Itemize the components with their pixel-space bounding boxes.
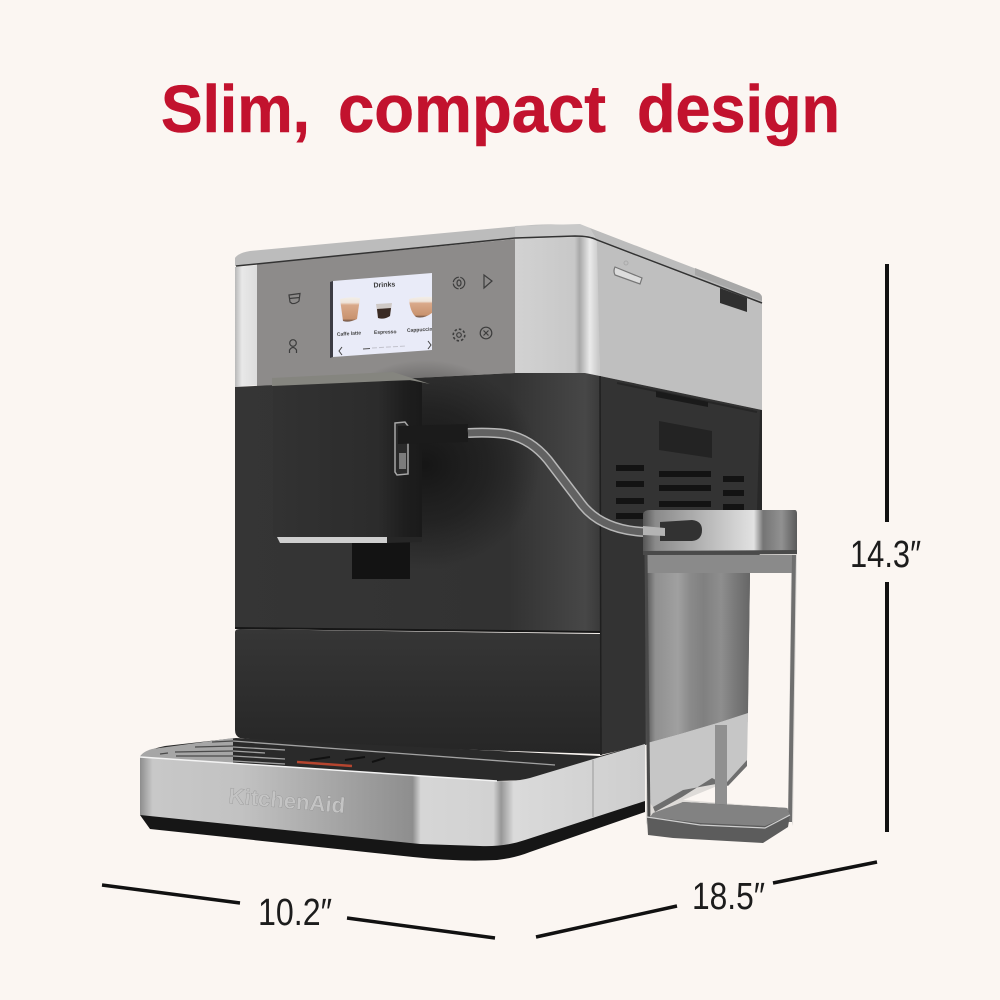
cup: caffe latte bbox=[340, 297, 360, 322]
machine lid bbox=[235, 224, 762, 304]
jug stem bbox=[715, 725, 727, 817]
dimension: depth: 18.5″ bbox=[692, 876, 765, 918]
icon: settings bbox=[453, 329, 465, 341]
brew head bbox=[272, 372, 430, 543]
jug dark band bbox=[653, 760, 747, 812]
title: compact bbox=[338, 72, 606, 147]
side window bbox=[659, 421, 712, 458]
jug upper shade bbox=[645, 555, 795, 573]
control panel bbox=[257, 239, 515, 386]
drawer gap bbox=[235, 628, 600, 632]
screen heading: Drinks bbox=[373, 281, 396, 290]
black side bbox=[600, 376, 762, 755]
black front upper bbox=[235, 373, 600, 632]
steel front left strip bbox=[235, 265, 258, 387]
dimension: height: 14.3″ bbox=[850, 534, 921, 576]
tray reflective left bbox=[140, 738, 233, 763]
black front lower drawer bbox=[235, 629, 600, 754]
icon: person bbox=[290, 340, 296, 353]
touchscreen bbox=[330, 273, 436, 358]
jug edges bbox=[646, 555, 649, 825]
icon: play bbox=[484, 275, 492, 288]
tray base bbox=[140, 800, 645, 861]
touchscreen: Espresso bbox=[374, 329, 397, 336]
dimension: height bbox=[850, 264, 921, 832]
front shadow bbox=[310, 360, 540, 570]
clear window bbox=[683, 573, 791, 808]
tank notch bbox=[720, 288, 747, 312]
tank lid bbox=[695, 268, 762, 301]
drip outlet bbox=[352, 540, 410, 579]
coffee machine bbox=[140, 224, 797, 861]
jug connector bbox=[643, 520, 702, 541]
tray indicator bbox=[297, 762, 352, 766]
jug contents bbox=[647, 573, 750, 743]
title: design bbox=[637, 72, 840, 147]
side handle bbox=[614, 261, 642, 284]
icon: bean bbox=[453, 277, 465, 289]
tray grate bbox=[160, 741, 555, 765]
cup: espresso bbox=[376, 303, 392, 319]
side vents bbox=[616, 465, 744, 519]
milk jug bbox=[643, 510, 797, 843]
jug lid bbox=[643, 510, 797, 553]
cup: cappuccino bbox=[409, 297, 433, 317]
icon: cup bbox=[289, 294, 300, 304]
drink labels: Caffe latte bbox=[337, 330, 361, 338]
panel icons bbox=[289, 275, 492, 353]
tray steel front bbox=[140, 744, 645, 846]
steel side bbox=[597, 241, 762, 410]
jug base bbox=[647, 802, 790, 843]
title: Slim, bbox=[161, 72, 310, 147]
dimension: depth bbox=[536, 862, 877, 937]
milk tube bbox=[468, 433, 645, 532]
touchscreen: Cappuccino bbox=[407, 327, 436, 334]
brand mark: KitchenAid bbox=[228, 783, 346, 818]
title bbox=[161, 72, 840, 147]
drip tray top bbox=[140, 738, 640, 781]
lid shadow line bbox=[236, 236, 762, 303]
milk nozzle bbox=[395, 422, 468, 475]
steel front corner bbox=[515, 237, 600, 376]
dimension: width bbox=[102, 885, 495, 938]
jug glass bbox=[645, 553, 797, 826]
dimension: width: 10.2″ bbox=[258, 892, 332, 934]
screen arrows and pager bbox=[339, 341, 431, 355]
icon: cancel bbox=[480, 327, 492, 339]
